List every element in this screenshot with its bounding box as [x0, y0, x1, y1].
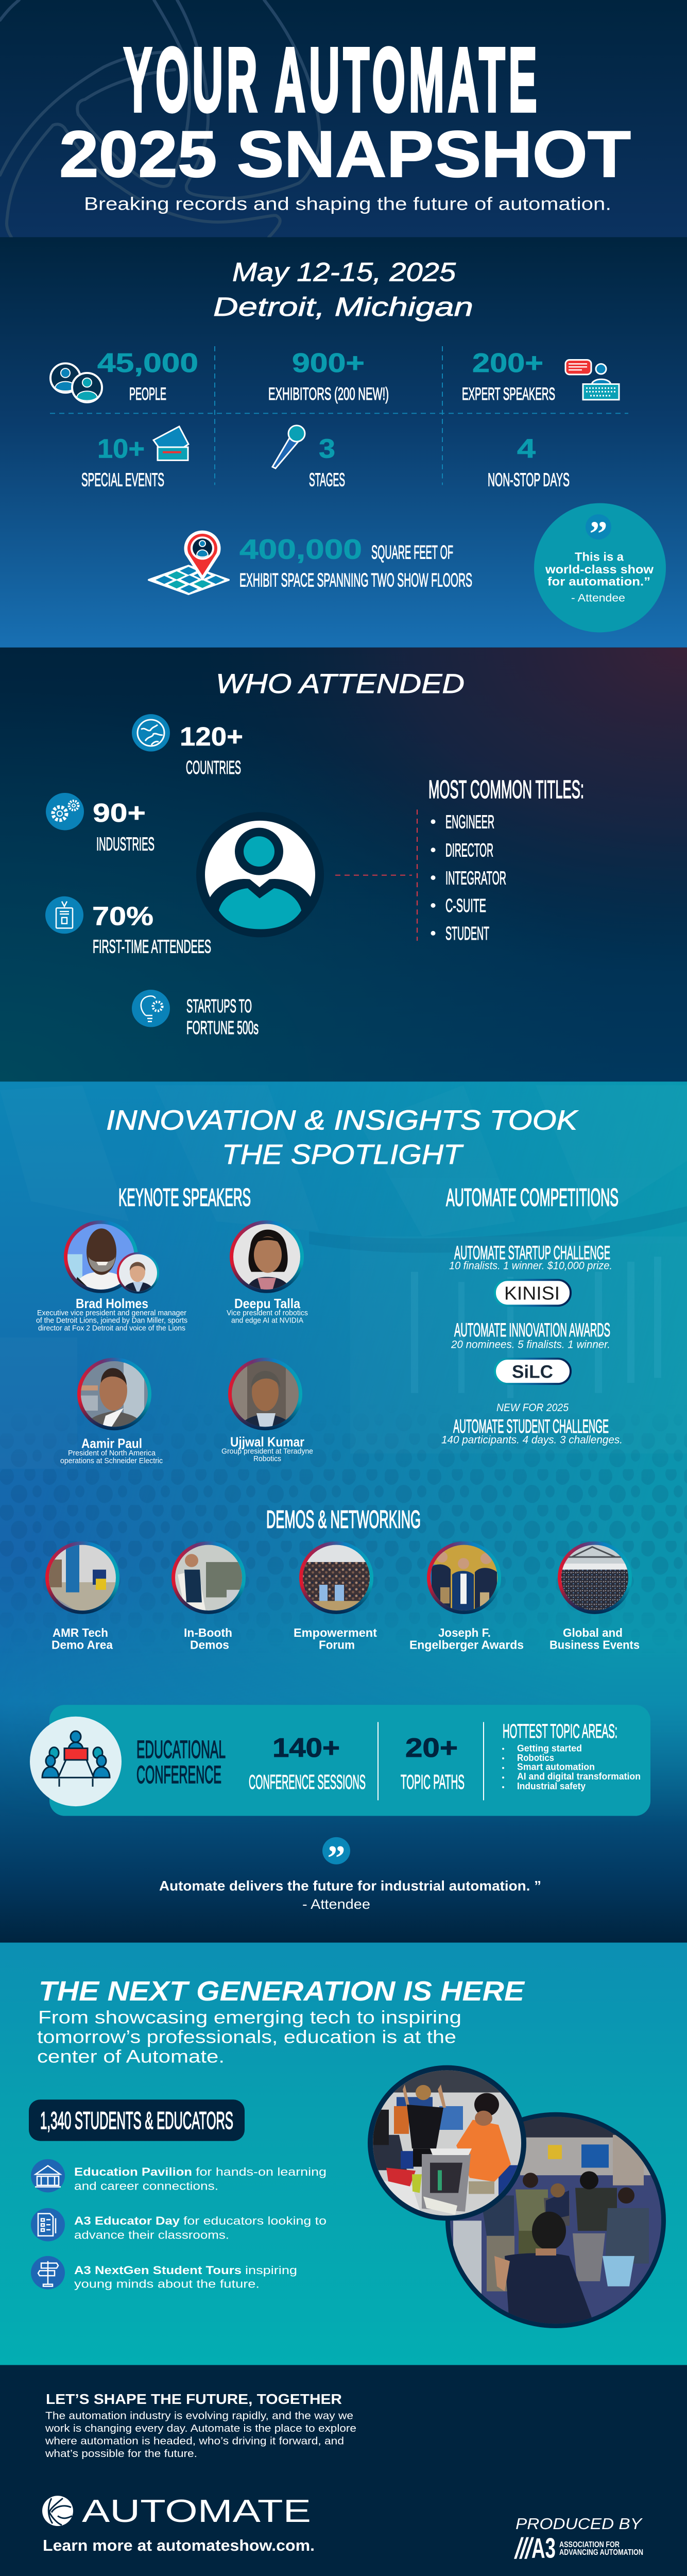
stat: people	[97, 348, 198, 404]
icon: conference table	[30, 1717, 122, 1806]
competition: innovation awards: SiLC	[512, 1362, 553, 1382]
stat: industries	[46, 793, 154, 855]
panel: educational conference: CONFERENCE SESSIONS	[249, 1771, 366, 1793]
demo: In-Booth Demos: Demos	[190, 1638, 229, 1652]
icon: people	[50, 363, 102, 402]
list: most common titles: INTEGRATOR	[445, 868, 506, 888]
heading: WHO ATTENDED	[216, 669, 465, 699]
title: YOUR AUTOMATE	[124, 29, 537, 131]
list: hottest topic areas	[502, 1720, 641, 1791]
demo: Global and Business Events	[549, 1541, 640, 1652]
heading: INNOVATION & INSIGHTS TOOK	[106, 1105, 579, 1136]
demo: Global and Business Events: Global and	[563, 1626, 623, 1640]
competition: startup challenge: 10 finalists. 1 winner. $10,000 prize.	[449, 1259, 612, 1272]
photo: students with guide	[445, 2112, 669, 2332]
speaker: Aamir Paul: President of North America	[68, 1449, 156, 1458]
item: student tours	[31, 2256, 297, 2291]
list: most common titles: C-SUITE	[445, 895, 486, 916]
speaker: Ujjwal Kumar: Group president at Teradyne	[221, 1447, 313, 1455]
intro text: From showcasing emerging tech to inspiring	[38, 2007, 461, 2027]
icon: ticket	[153, 427, 188, 460]
logo: Automate	[42, 2494, 311, 2529]
competition: innovation awards: 20 nominees. 5 finalists. 1 winner.	[451, 1338, 610, 1351]
speaker: Ujjwal Kumar: Ujjwal Kumar	[230, 1435, 304, 1450]
website link: Learn more at automateshow.com.	[43, 2536, 315, 2554]
demo: In-Booth Demos	[171, 1541, 246, 1652]
stat: exhibit space: EXHIBIT SPACE SPANNING TWO SHOW FLOORS	[239, 569, 472, 590]
stat: speakers	[462, 348, 555, 404]
stat: non-stop days	[488, 434, 570, 490]
icon: speaker at keyboard	[565, 360, 619, 400]
stat: startups to fortune 500s: FORTUNE 500s	[186, 1018, 259, 1038]
speaker: Deepu Talla	[227, 1221, 308, 1325]
list: most common titles	[428, 775, 584, 944]
stat: people: 45,000	[97, 348, 198, 378]
stat: first-time attendees	[45, 896, 211, 957]
stat: exhibit space: 400,000	[239, 534, 362, 565]
label: CONFERENCE	[136, 1761, 221, 1789]
date and location	[213, 257, 473, 321]
panel: who attended	[0, 648, 687, 1081]
panel: event stats	[0, 237, 687, 648]
stat: exhibitors: EXHIBITORS (200 NEW!)	[268, 384, 389, 404]
stat: startups to fortune 500s	[132, 990, 259, 1038]
speaker: Ujjwal Kumar	[221, 1358, 313, 1463]
callout: attendee quote: - Attendee	[571, 591, 625, 604]
callout: attendee quote	[159, 1837, 541, 1912]
competition: startup challenge: KINISI	[504, 1283, 560, 1303]
closing message: where automation is headed, who’s driving it forward, and	[45, 2435, 344, 2447]
closing message: work is changing every day. Automate is the place to explore	[45, 2422, 356, 2434]
demo: AMR Tech Demo Area	[45, 1541, 119, 1652]
logo: produced by A3: ADVANCING AUTOMATION	[559, 2548, 643, 2557]
stat: topic paths: 20+	[405, 1734, 458, 1763]
heading: demos and networking: DEMOS & NETWORKING	[266, 1506, 421, 1533]
badge: students and educators: 1,340 STUDENTS & EDUCATORS	[40, 2107, 233, 2134]
demo: Empowerment Forum	[294, 1541, 377, 1652]
logo: produced by A3: PRODUCED BY	[516, 2515, 643, 2533]
panel: educational conference	[30, 1705, 650, 1816]
demo: Empowerment Forum: Empowerment	[294, 1626, 377, 1640]
list: most common titles: STUDENT	[445, 923, 489, 944]
stat: topic paths	[401, 1734, 465, 1793]
speaker: Brad Holmes: Brad Holmes	[76, 1297, 148, 1311]
item: education pavilion: Education Pavilion	[74, 2165, 192, 2178]
demo: Empowerment Forum: Forum	[319, 1638, 355, 1652]
item: educator day: advance their classrooms.	[74, 2228, 229, 2242]
heading: THE NEXT GENERATION IS HERE	[39, 1976, 525, 2007]
demo: Engelberger Awards	[409, 1541, 524, 1652]
callout: attendee quote: ”	[590, 514, 607, 553]
item: educator day: A3 Educator Day	[74, 2214, 180, 2227]
stat: stages: 3	[319, 434, 335, 464]
speaker: Deepu Talla: and edge AI at NVIDIA	[231, 1317, 303, 1325]
callout: attendee quote: world-class show	[545, 563, 654, 577]
stat: non-stop days: NON-STOP DAYS	[488, 469, 570, 490]
closing message	[45, 2391, 356, 2460]
title	[59, 29, 631, 191]
panel: hero header	[0, 0, 687, 237]
stat: special events: SPECIAL EVENTS	[81, 469, 164, 490]
demo: AMR Tech Demo Area: AMR Tech	[53, 1626, 108, 1640]
logo: produced by A3	[514, 2515, 643, 2564]
competition: innovation awards	[451, 1319, 610, 1384]
speaker: Aamir Paul: operations at Schneider Electric	[60, 1457, 163, 1465]
intro text: tomorrow’s professionals, education is at the	[37, 2027, 456, 2047]
closing message: LET’S SHAPE THE FUTURE, TOGETHER	[46, 2391, 342, 2407]
callout: attendee quote: This is a	[575, 550, 624, 564]
callout: attendee quote: - Attendee	[302, 1896, 370, 1912]
panel: the next generation	[0, 1943, 687, 2365]
panel: educational conference: TOPIC PATHS	[401, 1771, 465, 1793]
stat: countries	[132, 714, 243, 778]
stat: conference sessions	[249, 1734, 366, 1793]
stat: exhibitors: 900+	[292, 348, 365, 378]
callout: attendee quote: Automate delivers the future for industrial automation. ”	[159, 1878, 541, 1894]
competition: startup challenge	[449, 1242, 612, 1306]
logo: Automate: AUTOMATE	[82, 2494, 311, 2529]
callout: attendee quote: ”	[328, 1838, 345, 1877]
panel: footer	[0, 2365, 687, 2576]
icon: map pin on floor plan	[149, 531, 229, 594]
list: hottest topic areas: Smart automation	[517, 1761, 595, 1772]
logo: produced by A3: A3	[531, 2532, 556, 2564]
stat: industries: INDUSTRIES	[96, 834, 154, 855]
demo: Engelberger Awards: Engelberger Awards	[409, 1638, 524, 1652]
list: hottest topic areas: AI and digital transformation	[517, 1771, 641, 1782]
competition: student challenge: NEW FOR 2025	[496, 1401, 569, 1414]
speaker: Deepu Talla: Deepu Talla	[234, 1297, 301, 1311]
stat: industries: 90+	[93, 798, 146, 827]
list: most common titles: DIRECTOR	[445, 840, 493, 860]
speaker: Ujjwal Kumar: Robotics	[253, 1455, 281, 1463]
title: 2025 SNAPSHOT	[59, 118, 631, 191]
photo: student with robot	[368, 2065, 526, 2221]
item: educator day: for educators looking to	[183, 2214, 327, 2227]
stat: special events	[81, 434, 164, 490]
item: educator day	[31, 2208, 327, 2242]
competition: student challenge: 140 participants. 4 days. 3 challenges.	[441, 1433, 623, 1446]
heading: keynote speakers: KEYNOTE SPEAKERS	[118, 1184, 251, 1211]
stat: conference sessions: 140+	[272, 1734, 340, 1763]
list: most common titles: ENGINEER	[445, 811, 494, 832]
intro text: center of Automate.	[37, 2046, 225, 2067]
demo: Global and Business Events: Business Events	[549, 1638, 640, 1652]
closing message: what’s possible for the future.	[45, 2448, 197, 2460]
speaker: Deepu Talla: Vice president of robotics	[227, 1309, 308, 1317]
panel: event stats: STAGES	[309, 469, 345, 490]
badge: students and educators	[29, 2099, 245, 2141]
item: education pavilion: for hands-on learning	[196, 2165, 327, 2178]
list: hottest topic areas: Industrial safety	[517, 1781, 586, 1791]
list: hottest topic areas: Robotics	[517, 1752, 554, 1763]
speaker: Brad Holmes: of the Detroit Lions, joined by Dan Miller, sports	[36, 1317, 187, 1325]
callout: attendee quote: for automation.”	[547, 575, 650, 588]
closing message: The automation industry is evolving rapidly, and the way we	[45, 2410, 353, 2421]
speaker: Aamir Paul: Aamir Paul	[81, 1437, 142, 1451]
stat: first-time attendees: 70%	[92, 901, 153, 931]
speaker: Brad Holmes	[36, 1221, 187, 1332]
label: EDUCATIONAL	[136, 1736, 226, 1764]
speaker: Brad Holmes: Executive vice president and general manager	[37, 1309, 186, 1317]
demo: Engelberger Awards: Joseph F.	[438, 1626, 491, 1640]
callout: attendee quote	[534, 503, 666, 632]
subtitle: Breaking records and shaping the future of automation.	[84, 194, 611, 214]
stat: countries: COUNTRIES	[186, 757, 241, 778]
stat: exhibitors	[268, 348, 389, 404]
heading: THE SPOTLIGHT	[222, 1139, 464, 1170]
stat: stages	[309, 434, 345, 490]
item: student tours: inspiring	[245, 2263, 297, 2277]
item: student tours: young minds about the future.	[74, 2277, 260, 2291]
demo: In-Booth Demos: In-Booth	[184, 1626, 232, 1640]
speaker: Brad Holmes: director at Fox 2 Detroit and voice of the Lions	[38, 1324, 185, 1332]
stat: speakers: EXPERT SPEAKERS	[462, 384, 555, 404]
demo: AMR Tech Demo Area: Demo Area	[51, 1638, 113, 1652]
date and location: Detroit, Michigan	[213, 292, 473, 321]
stat: countries: 120+	[180, 721, 243, 751]
competition: student challenge	[441, 1401, 623, 1446]
stat: startups to fortune 500s: STARTUPS TO	[186, 995, 252, 1016]
speaker: Aamir Paul	[60, 1358, 163, 1465]
intro text	[37, 2007, 461, 2067]
logo: produced by A3: ASSOCIATION FOR	[559, 2540, 620, 2549]
icon: microphone	[272, 426, 305, 468]
heading	[106, 1105, 579, 1170]
stat: exhibit space	[239, 534, 472, 590]
date and location: May 12-15, 2025	[232, 257, 456, 287]
stat: special events: 10+	[97, 434, 145, 464]
label	[136, 1736, 226, 1789]
stat: exhibit space: SQUARE FEET OF	[371, 541, 453, 563]
stat: non-stop days: 4	[517, 434, 536, 464]
stat: speakers: 200+	[472, 348, 543, 378]
stat: first-time attendees: FIRST-TIME ATTENDEES	[93, 936, 211, 957]
stat: people: PEOPLE	[129, 384, 166, 404]
panel: innovation and insights	[0, 1081, 687, 1943]
item: education pavilion	[31, 2159, 327, 2193]
list: hottest topic areas: Getting started	[517, 1742, 582, 1753]
icon: central attendee avatar	[196, 812, 324, 939]
item: student tours: A3 NextGen Student Tours	[74, 2263, 242, 2277]
item: education pavilion: and career connections.	[74, 2179, 218, 2193]
